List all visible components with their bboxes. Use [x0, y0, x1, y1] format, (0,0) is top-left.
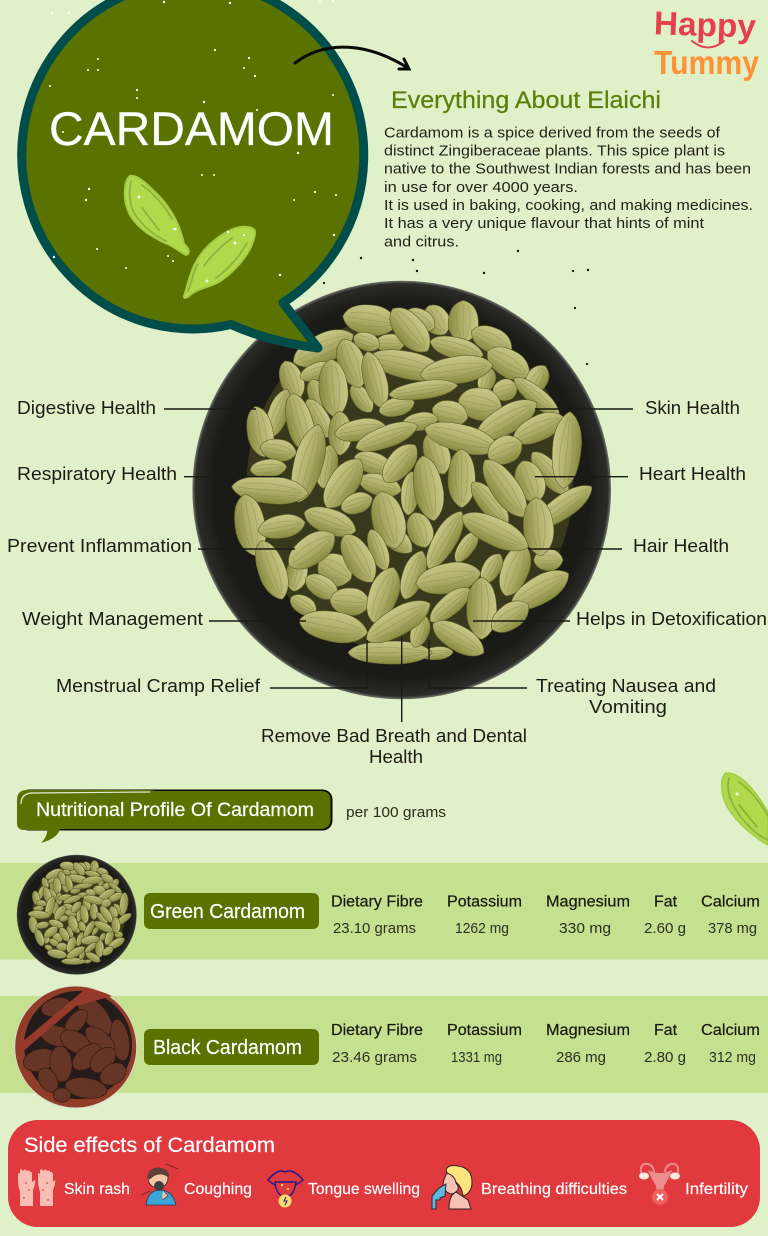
label: Black Cardamom: Black Cardamom: [153, 1037, 302, 1059]
panel: side effects: [8, 1120, 760, 1227]
white speckles: [49, 0, 337, 282]
nutrition values: black: Potassium: [447, 1022, 522, 1039]
image: green cardamom bowl: [17, 855, 137, 975]
nutrition values: black: Dietary Fibre: [331, 1022, 423, 1039]
logo: Happy Tummy: Tummy: [654, 44, 760, 81]
nutrition values: black: Magnesium: [546, 1022, 630, 1039]
heading: Everything About Elaichi: Everything About Elaichi: [391, 87, 661, 114]
nutrition values: green: Dietary Fibre: [331, 894, 423, 911]
nutrition values: green: 1262 mg: [455, 920, 509, 937]
icon: uterus: [639, 1164, 680, 1205]
icon: swollen tongue: [268, 1171, 303, 1208]
icon: coughing man: [141, 1164, 178, 1205]
nutrition values: green: Fat: [654, 894, 678, 911]
text: coughing: Coughing: [184, 1181, 252, 1198]
nutrition values: black: 23.46 grams: [332, 1049, 417, 1066]
arrow: bubble to heading: [295, 47, 409, 69]
label: Green Cardamom: [144, 893, 319, 929]
benefit labels: right: Helps in Detoxification: [576, 609, 767, 629]
text: skin rash: Skin rash: [64, 1181, 130, 1198]
nutrition values: green: Potassium: [447, 894, 522, 911]
benefit label: bottom: Remove Bad Breath and Dental: [261, 726, 527, 746]
benefit labels: left: [7, 398, 261, 696]
benefit labels: right: Hair Health: [633, 536, 729, 556]
benefit labels: right: Treating Nausea and: [536, 676, 716, 696]
nutrition values: black: 312 mg: [709, 1049, 756, 1066]
text block: intro: It has a very unique flavour that hints of mint: [384, 215, 705, 232]
nutrition values: black: [331, 1022, 760, 1066]
text: breathing difficulties: Breathing difficulties: [481, 1181, 627, 1198]
benefit labels: left: Prevent Inflammation: [7, 536, 192, 556]
nutrition values: black: 1331 mg: [451, 1049, 502, 1066]
benefit label: bottom: [261, 726, 527, 767]
panel: black cardamom row: [0, 986, 768, 1108]
benefit labels: right: Vomiting: [589, 697, 667, 717]
title: CARDAMOM: [49, 102, 334, 155]
nutrition values: green: Calcium: [701, 894, 760, 911]
label: Green Cardamom: Green Cardamom: [150, 901, 305, 923]
nutrition values: black: Fat: [654, 1022, 678, 1039]
benefit labels: left: Menstrual Cramp Relief: [56, 676, 261, 696]
text: infertility: Infertility: [685, 1181, 748, 1198]
heading: nutritional profile: [17, 790, 332, 843]
text block: intro: native to the Southwest Indian forests and has been: [384, 161, 751, 178]
icon: right cardamom pod: [184, 227, 255, 298]
nutrition values: green: 2.60 g: [644, 920, 686, 937]
logo: Happy Tummy: [653, 4, 760, 81]
icon: breathing mask person: [432, 1166, 472, 1209]
leader lines: [164, 409, 633, 722]
text block: intro: and citrus.: [384, 234, 459, 250]
benefit labels: left: Digestive Health: [17, 398, 156, 418]
text: tongue swelling: Tongue swelling: [308, 1181, 420, 1198]
nutrition values: green: Magnesium: [546, 894, 630, 911]
icon: left cardamom pod: [125, 176, 189, 255]
icon: decorative cardamom pod right: [722, 773, 768, 845]
label: Black Cardamom: [144, 1029, 319, 1065]
nutrition values: black: 2.80 g: [644, 1049, 686, 1066]
benefit labels: left: Respiratory Health: [17, 464, 177, 484]
text block: intro: distinct Zingiberaceae plants. This spice plant is: [384, 142, 725, 160]
logo: Happy Tummy: Happy: [653, 4, 757, 45]
panel: green cardamom row: [0, 855, 768, 975]
note: per 100 grams: per 100 grams: [346, 804, 446, 821]
heading: side effects: Side effects of Cardamom: [24, 1134, 275, 1157]
nutrition values: green: 378 mg: [708, 920, 757, 937]
nutrition values: black: Calcium: [701, 1022, 760, 1039]
nutrition values: black: 286 mg: [556, 1049, 606, 1066]
speech bubble with title: [22, 0, 364, 348]
benefit label: bottom: Health: [369, 747, 423, 767]
benefit labels: left: Weight Management: [22, 609, 203, 629]
benefit labels: right: Heart Health: [639, 464, 746, 484]
text block: intro: Cardamom is a spice derived from the seeds of: [384, 124, 721, 142]
nutrition values: green: 330 mg: [559, 920, 611, 937]
benefit labels: right: Skin Health: [645, 398, 740, 418]
text block: intro: [384, 124, 753, 250]
nutrition values: green: 23.10 grams: [333, 920, 416, 937]
photo: bowl of green cardamom: [192, 281, 611, 699]
text block: intro: It is used in baking, cooking, and making medicines.: [384, 197, 753, 214]
black speckles: [323, 250, 589, 365]
nutrition values: green: [331, 894, 760, 937]
benefit labels: right: [536, 398, 767, 717]
icon: skin rash hands: [18, 1169, 55, 1206]
heading: nutritional profile: Nutritional Profile Of Cardamom: [36, 800, 314, 821]
image: black cardamom bowl: [15, 986, 137, 1108]
text block: intro: in use for over 4000 years.: [384, 179, 578, 196]
